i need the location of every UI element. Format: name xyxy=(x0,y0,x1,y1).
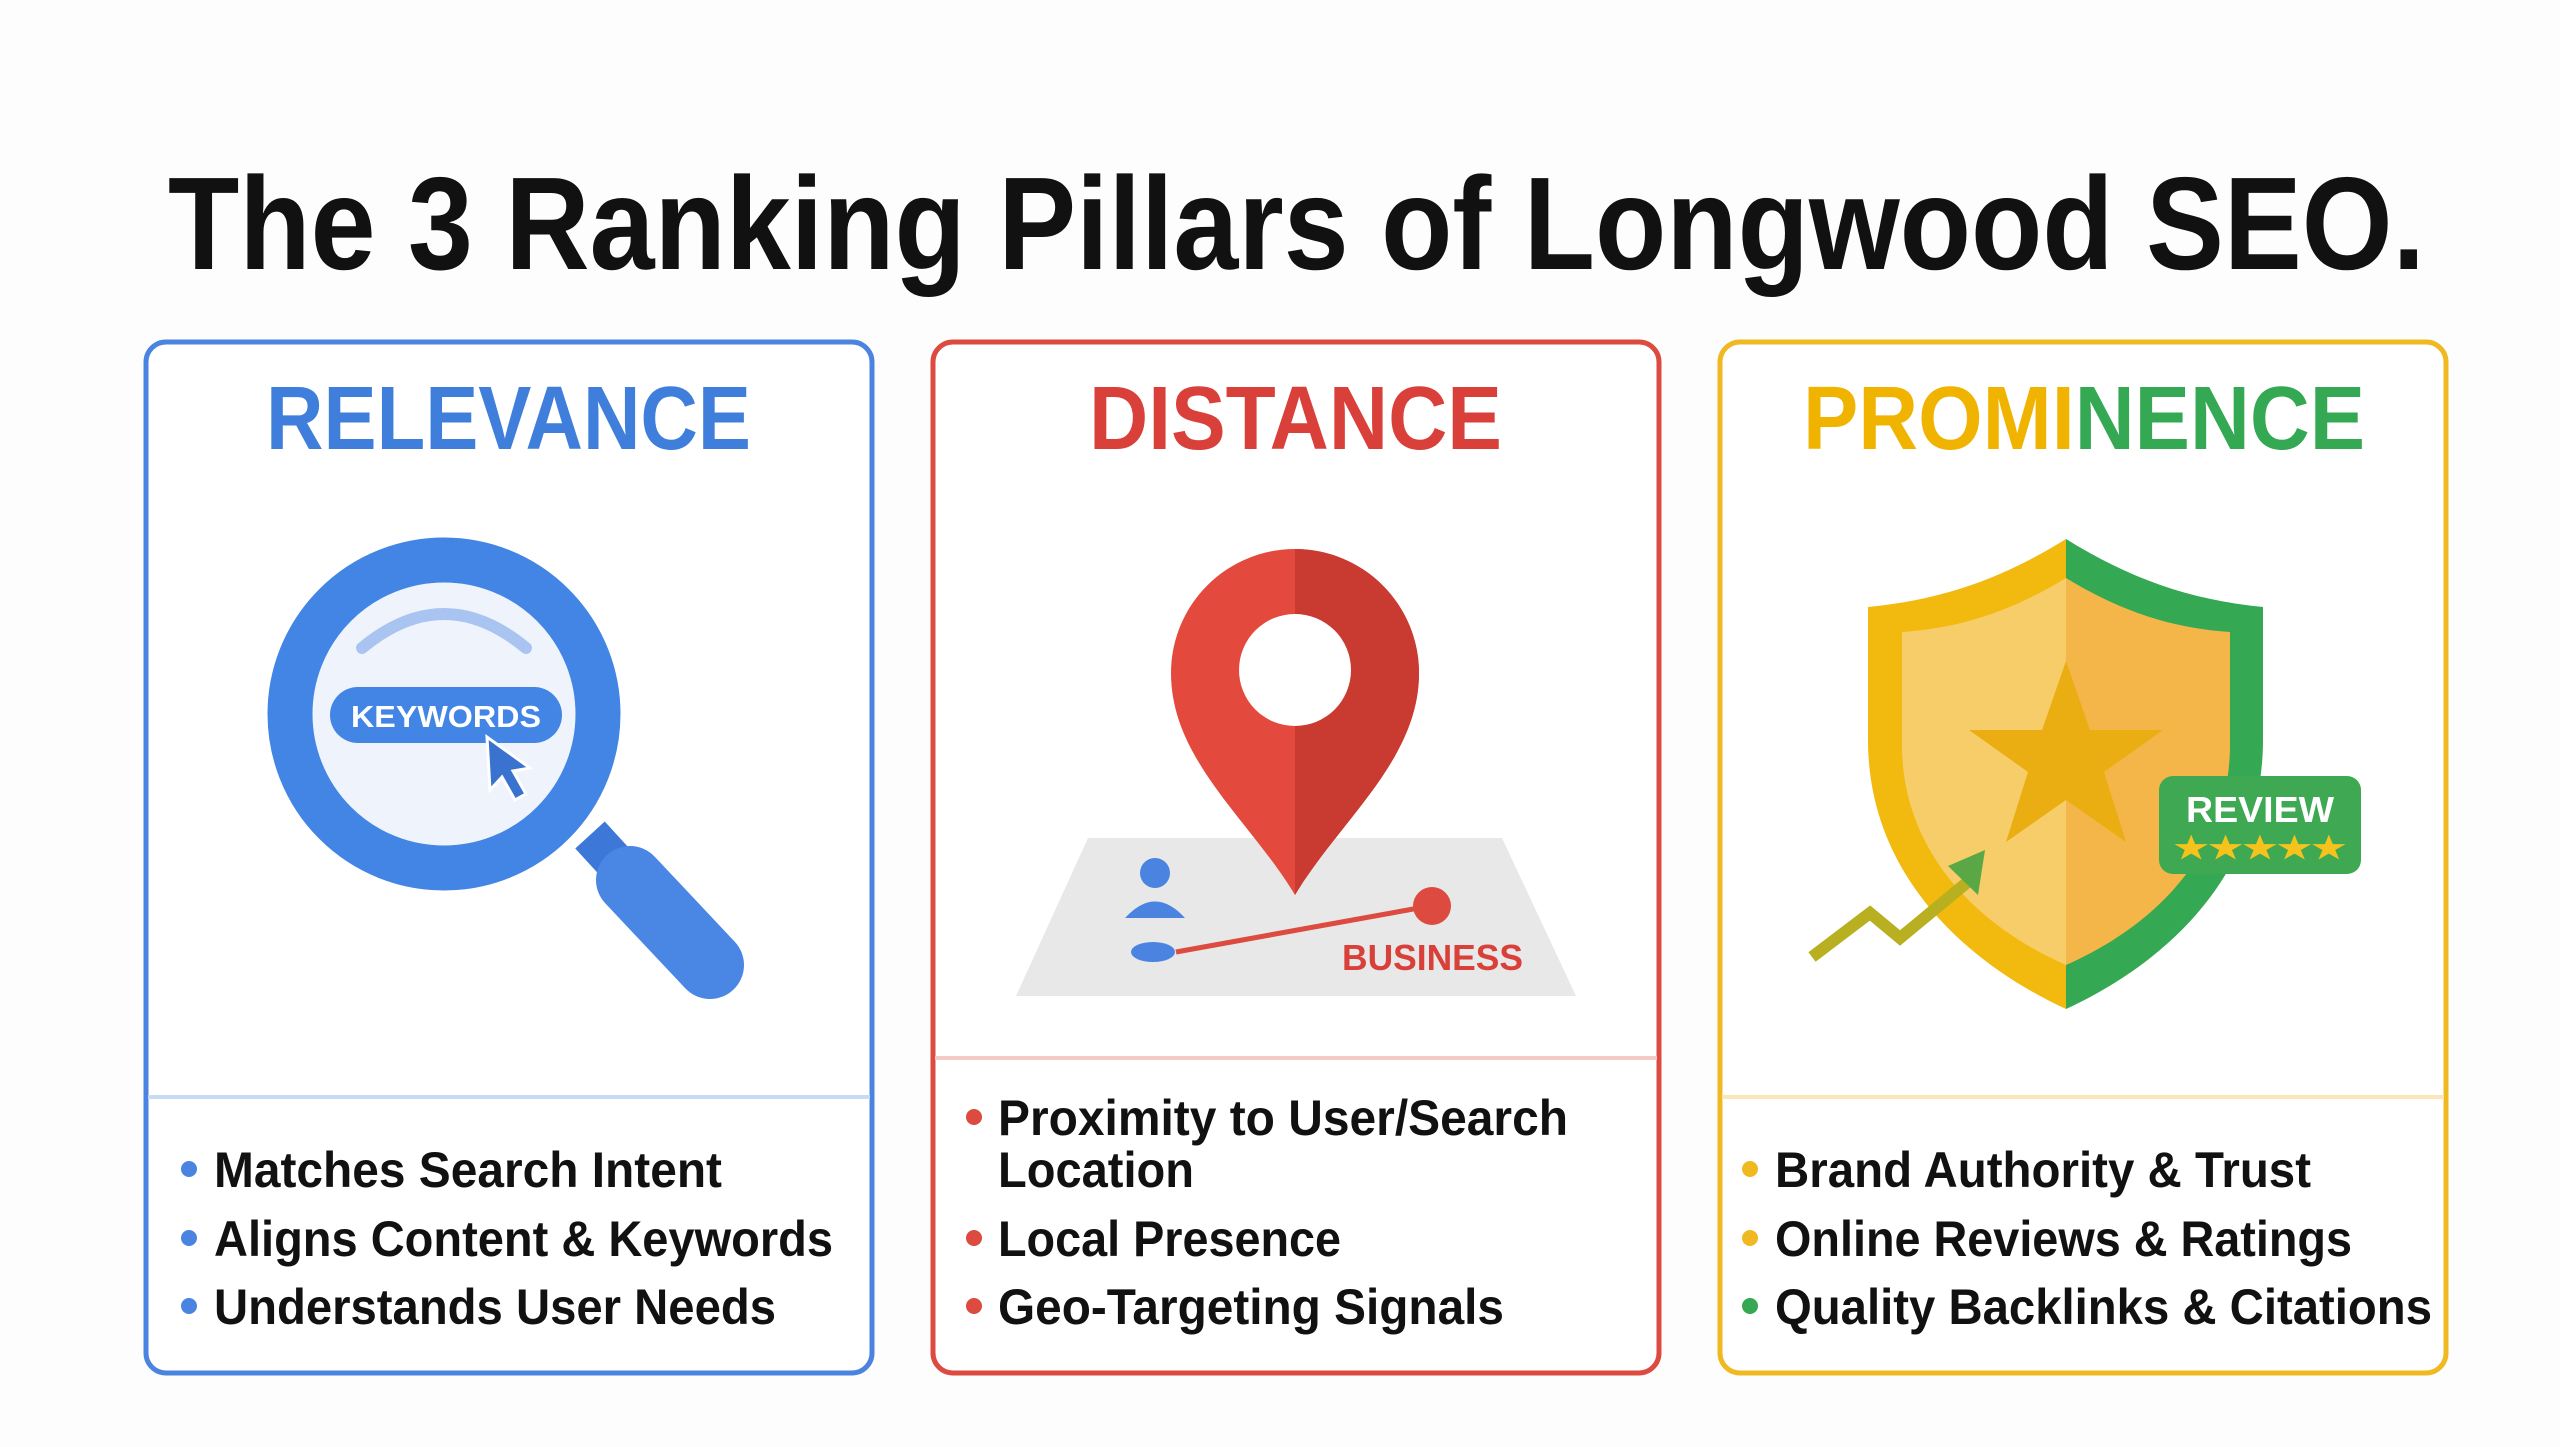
bullets: relevance: Aligns Content & Keywords xyxy=(214,1211,833,1267)
icon: magnifying glass: KEYWORDS xyxy=(351,699,541,734)
bullets: relevance: Matches Search Intent xyxy=(214,1142,722,1198)
heading: prominence: PROMINENCE xyxy=(1803,369,2365,469)
icon: shield with star and review badge: REVIEW xyxy=(2186,789,2334,830)
panel: prominence xyxy=(1720,342,2446,1373)
icon: map with pin xyxy=(1016,549,1576,996)
bullets: distance: Location xyxy=(998,1142,1194,1198)
bullets: prominence xyxy=(1742,1142,2432,1335)
bullets: prominence: Online Reviews & Ratings xyxy=(1775,1211,2352,1267)
heading: relevance: RELEVANCE xyxy=(266,369,751,469)
bullets: relevance: Understands User Needs xyxy=(214,1279,776,1335)
bullets: distance xyxy=(966,1090,1568,1335)
icon: shield with star and review badge: ★★★★★ xyxy=(2174,832,2346,865)
icon: magnifying glass xyxy=(290,560,710,965)
bullets: distance: Local Presence xyxy=(998,1211,1341,1267)
icon: map with pin: BUSINESS xyxy=(1342,937,1523,978)
bullets: distance: Proximity to User/Search xyxy=(998,1090,1568,1146)
bullets: relevance xyxy=(181,1142,833,1335)
heading: distance: DISTANCE xyxy=(1089,369,1502,469)
icon: shield with star and review badge xyxy=(1812,539,2361,1009)
panel: distance xyxy=(933,342,1659,1373)
bullets: distance: Geo-Targeting Signals xyxy=(998,1279,1504,1335)
bullets: prominence: Quality Backlinks & Citations xyxy=(1775,1279,2432,1335)
bullets: prominence: Brand Authority & Trust xyxy=(1775,1142,2311,1198)
panel: relevance xyxy=(146,342,872,1373)
